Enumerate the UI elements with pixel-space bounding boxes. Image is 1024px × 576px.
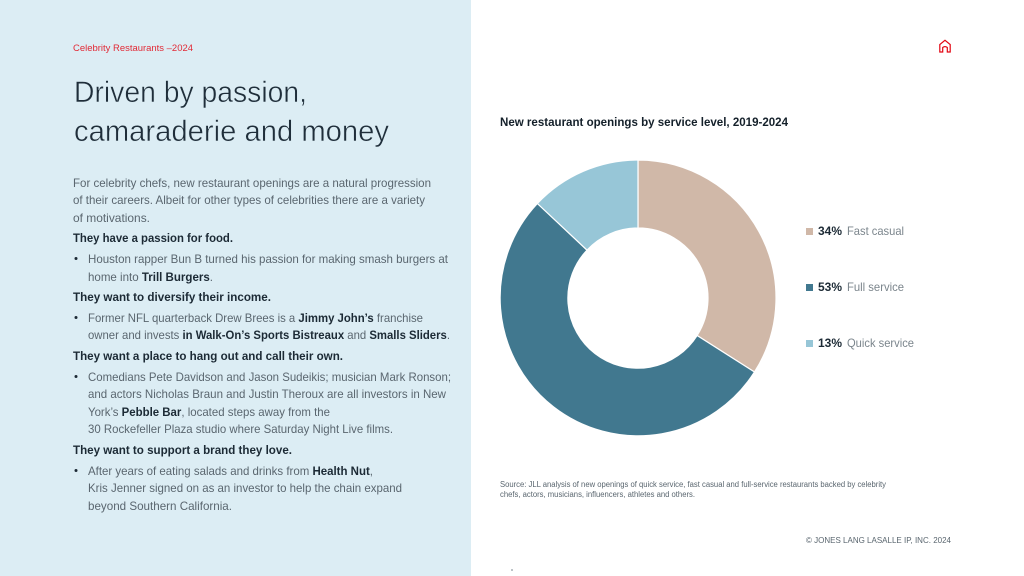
legend item: fast casual: Fast casual (847, 224, 904, 238)
text block: introduction: of motivations. (73, 211, 150, 225)
legend item: quick service (806, 336, 914, 350)
text block: passion for food: They have a passion for food. (73, 231, 233, 245)
text block: support a brand: Kris Jenner signed on as an investor to help the chain expand (88, 481, 402, 495)
slice: full service 53% (500, 204, 754, 436)
source note: Source: JLL analysis of new openings of quick service, fast casual and full-service restaurants backed by celebrity (500, 480, 886, 489)
copyright: © JONES LANG LASALLE IP, INC. 2024 (806, 535, 951, 545)
text block: place to hang out (73, 349, 451, 436)
legend item: fast casual (806, 224, 904, 238)
text block: place to hang out: 30 Rockefeller Plaza studio where Saturday Night Live films. (88, 422, 393, 436)
text block: diversify income: Former NFL quarterback Drew Brees is a Jimmy John’s franchise (88, 311, 423, 325)
slice: quick service 13% (537, 160, 638, 250)
legend item: quick service: Quick service (847, 336, 914, 350)
legend (806, 224, 914, 350)
text block: place to hang out: They want a place to hang out and call their own. (73, 349, 343, 363)
panel: left background (0, 0, 471, 576)
small footer dot (511, 569, 513, 571)
text block: passion for food: home into Trill Burgers. (88, 270, 213, 284)
text block: place to hang out: and actors Nicholas Braun and Justin Theroux are all investors in New (88, 387, 446, 401)
title: Driven by passion, (74, 76, 307, 109)
text block: introduction: of their careers. Albeit for other types of celebrities there are a variety (73, 193, 425, 207)
text block: passion for food: Houston rapper Bun B turned his passion for making smash burgers at (88, 252, 449, 266)
text block: support a brand: They want to support a brand they love. (73, 443, 292, 457)
text block: diversify income (73, 290, 450, 342)
text block: diversify income: owner and invests in Walk-On’s Sports Bistreaux and Smalls Sliders. (88, 328, 450, 342)
eyebrow label: Celebrity Restaurants –2024 (73, 43, 193, 53)
icon: red house logo (940, 40, 950, 52)
legend item: full service: Full service (847, 280, 904, 294)
source note: chefs, actors, musicians, influencers, athletes and others. (500, 490, 695, 499)
legend item: full service (806, 280, 904, 294)
title: camaraderie and money (74, 115, 389, 148)
source note (500, 480, 886, 499)
legend item: fast casual: 34% (818, 224, 842, 238)
legend item: quick service: 13% (818, 336, 842, 350)
text block: support a brand (73, 443, 402, 513)
text block: introduction (73, 176, 431, 225)
text block: place to hang out: York’s Pebble Bar, located steps away from the (88, 405, 330, 419)
text block: place to hang out: Comedians Pete Davidson and Jason Sudeikis; musician Mark Ronson; (88, 370, 451, 384)
text block: support a brand: After years of eating salads and drinks from Health Nut, (88, 464, 373, 478)
text block: passion for food (73, 231, 449, 284)
legend item: full service: 53% (818, 280, 842, 294)
text block: support a brand: beyond Southern California. (88, 499, 232, 513)
text block: diversify income: They want to diversify their income. (73, 290, 271, 304)
title (74, 76, 389, 148)
donut chart (500, 160, 776, 436)
text block: introduction: For celebrity chefs, new restaurant openings are a natural progression (73, 176, 431, 190)
chart title: New restaurant openings by service level, 2019-2024 (500, 115, 788, 129)
slice: fast casual 34% (638, 160, 776, 372)
